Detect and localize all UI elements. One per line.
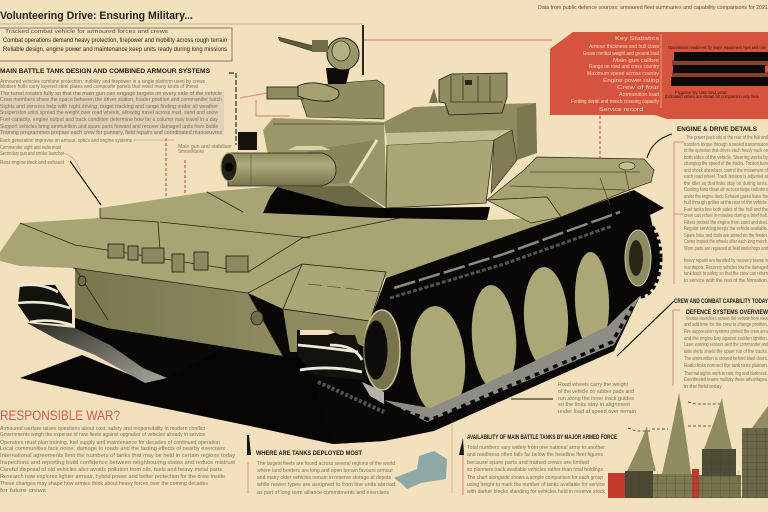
red panel text: Main gun calibre xyxy=(613,58,659,64)
center note xyxy=(558,382,636,415)
bottom left text xyxy=(0,407,235,494)
callout note: barrel xyxy=(178,144,232,155)
callout note: barrel: Smoothbore xyxy=(178,149,204,155)
intro box: Combat operations demand heavy protection, firepower and mobility across rough terrain xyxy=(3,37,228,44)
intro box: Tracked combat vehicle for armoured forces and crews xyxy=(5,29,168,35)
bottom middle text: where land borders are long and open terrain favours armour xyxy=(256,468,393,474)
section heading and paragraph: left: Each generation improves on armour, optics and engine systems xyxy=(0,138,132,144)
section heading and paragraph: left: Armoured vehicles combine protection, mobility and firepower in a single platform used by crews xyxy=(0,79,205,85)
periscope head xyxy=(312,38,359,70)
deck controls xyxy=(108,244,248,272)
bottom left text: Research now explores lighter armour, hybrid power and better protection for the crew inside xyxy=(0,474,225,480)
chart bars xyxy=(608,428,768,498)
red panel text: Ammunition load xyxy=(619,92,659,98)
bottom middle text: The largest fleets are found across several regions of the world xyxy=(257,461,395,467)
cupola base xyxy=(297,80,384,119)
lower track links xyxy=(318,296,640,422)
right column: upper text xyxy=(674,126,768,284)
bottom left text: Inspections and reporting build confidence between neighbouring states and reduce mistrust xyxy=(0,460,235,466)
periscope neck xyxy=(326,68,350,84)
bottom center text: because spare parts and trained crews are limited xyxy=(467,460,589,466)
bottom left text: Armoured warfare raises questions about cost, safety and responsibility in modern conflict xyxy=(0,426,205,432)
front track highlight: right xyxy=(298,335,365,380)
bottom middle text: as part of long term alliance commitments and exercises xyxy=(257,490,389,496)
antenna xyxy=(362,25,364,75)
turret shadow band xyxy=(263,187,490,220)
red panel xyxy=(550,32,768,119)
intro box: Reliable design, engine power and maintenance keep units ready during long missions xyxy=(3,46,227,53)
red panel: Figures by unit and year xyxy=(675,90,727,95)
bottom center text: AVAILABILITY OF MAIN BATTLE TANKS BY MAJOR ARMED FORCE xyxy=(467,434,617,441)
side strip under fender xyxy=(283,309,384,352)
bottom middle text: WHERE ARE TANKS DEPLOYED MOST xyxy=(256,450,362,457)
turret left block xyxy=(263,118,387,208)
secondary gun xyxy=(267,87,303,99)
tank illustration xyxy=(0,25,664,444)
turret top deck xyxy=(384,103,537,158)
right column: lower text xyxy=(673,298,768,390)
section heading and paragraph: left: Fuel capacity, engine output and track condition determine how far a column may travel in a day xyxy=(0,117,218,123)
turret hatch xyxy=(288,146,330,150)
tank body silhouette xyxy=(297,190,664,444)
left track strip xyxy=(27,323,167,383)
section heading and paragraph: left: Modern hulls carry layered steel plates and composite panels that resist many kinds of threat xyxy=(0,84,198,90)
red panel text: Engine power rating xyxy=(603,78,659,84)
bottom middle text: while newer types are assigned to front line units abroad xyxy=(256,482,395,488)
title: Volunteering Drive: Ensuring Military... xyxy=(0,10,193,22)
section heading and paragraph: left: MAIN BATTLE TANK DESIGN AND COMBINED ARMOUR SYSTEMS xyxy=(0,68,211,75)
small note: left: Rear engine deck and exhaust xyxy=(0,160,64,166)
center note: under load at speed over terrain xyxy=(558,409,636,415)
bottom left text: Operators must plan training, fuel supply and maintenance for decades of continued operation xyxy=(0,440,220,446)
section heading and paragraph: left: Support vehicles bring ammunition and spare parts forward and recover damaged units from battle xyxy=(0,124,218,130)
front lower plate xyxy=(75,268,283,356)
bar chart xyxy=(608,393,768,498)
bottom left text: Careful disposal of old vehicles also avoids pollution from oils, fuels and heavy metal parts xyxy=(0,467,222,473)
section heading and paragraph: left xyxy=(0,68,224,144)
main deck xyxy=(0,186,561,309)
tank shadow xyxy=(20,345,384,444)
red panel text xyxy=(571,36,660,113)
leader lines: left xyxy=(60,40,674,399)
bottom left text: International agreements limit the numbers of tanks that may be held in certain regions today xyxy=(0,453,235,459)
bottom center text: The chart alongside shows a simple comparison for each group xyxy=(467,475,603,481)
bottom center text xyxy=(452,424,617,495)
red panel text: Service record xyxy=(599,107,643,113)
gun base bracket xyxy=(238,132,257,150)
hull rear block xyxy=(20,262,300,378)
road wheels xyxy=(407,251,611,418)
right column: lower text: in the field today xyxy=(684,384,722,390)
bottom center text: so planners track available vehicles rather than total holdings xyxy=(467,467,603,473)
upper track rail xyxy=(394,212,620,288)
red panel text: Key Statistics xyxy=(615,36,660,42)
deck detail lines xyxy=(20,192,400,356)
right column: upper text: ENGINE & DRIVE DETAILS xyxy=(677,126,758,133)
center note: so the links stay in alignment xyxy=(558,402,630,408)
red panel text: Fording depth and trench crossing capacity xyxy=(571,99,659,105)
small note: left xyxy=(0,145,64,166)
red panel: Estimated values are shown for comparison only here xyxy=(665,94,760,99)
red panel text: Gross combat weight and ground load xyxy=(583,51,659,57)
bottom left text: These changes may shape how armies think about heavy forces over the coming decades xyxy=(0,481,208,487)
red panel text: Maximum speed across country xyxy=(587,71,659,77)
small note: left: Secondary gun and smoke launcher xyxy=(0,151,64,157)
turret front face xyxy=(386,140,494,208)
right fender xyxy=(487,157,654,217)
small cone xyxy=(429,88,438,103)
center note: of the vehicle on rubber pads and xyxy=(558,389,634,395)
intro box xyxy=(0,28,232,61)
section heading and paragraph: left: Training programmes prepare each crew for gunnery, field repairs and coordinated manoeuvres xyxy=(0,130,222,136)
red panel text: Armour thickness and hull class xyxy=(589,44,659,50)
section heading and paragraph: left: The turret rotates fully so that the main gun can engage targets on every side of the vehicle xyxy=(0,91,222,97)
bottom center text: and readiness often falls far below the headline fleet figures xyxy=(467,452,603,458)
bottom left text: RESPONSIBLE WAR? xyxy=(0,407,120,423)
bottom center text: with darker blocks standing for vehicles held in reserve stock xyxy=(466,489,605,495)
periscope barrel xyxy=(278,37,314,51)
plate bolts xyxy=(78,276,263,325)
front wheel xyxy=(364,310,400,390)
bottom center text: Total numbers vary widely from one national army to another xyxy=(467,445,605,451)
chart spikes xyxy=(627,393,768,474)
chart labels xyxy=(628,402,720,431)
red panel text: Crew of four xyxy=(617,85,660,91)
section heading and paragraph: left: Crew members share the space between the driver station, loader position and commander hatch xyxy=(0,97,222,103)
bottom left text: Governments weigh the expense of new fleets against upgrades of vehicles already in service xyxy=(0,432,205,438)
map xyxy=(394,451,447,489)
bottom middle text: and many older vehicles remain in reserve storage at depots xyxy=(257,475,391,481)
black bars xyxy=(671,52,768,86)
bottom left text: for future crews xyxy=(0,488,46,494)
front track highlight: left xyxy=(18,285,72,325)
center note: run along the inner track guides xyxy=(558,396,634,402)
middle fender xyxy=(283,264,386,321)
main gun barrel xyxy=(221,153,336,186)
center note: Road wheels carry the weight xyxy=(558,382,628,388)
section heading and paragraph: left: Suspension units spread the weight over road wheels, allowing travel across mud, sand and snow xyxy=(0,110,219,116)
bottom center text: using height to mark the number of tanks available for service xyxy=(467,482,605,488)
cargo box xyxy=(439,73,507,115)
section heading and paragraph: left: Sights and sensors help with night driving, target tracking and range finding under all weather xyxy=(0,104,218,110)
red panel text: Range on road and cross country xyxy=(589,64,659,70)
small note: left: Commander sight and radio mast xyxy=(0,145,61,151)
bottom left text: Local communities face noise, damage to roads and the lasting effects of nearby exercises xyxy=(0,446,225,452)
callout note: barrel: Main gun and stabiliser xyxy=(178,144,232,150)
bottom middle text xyxy=(247,435,395,496)
rear sprocket xyxy=(620,220,660,296)
